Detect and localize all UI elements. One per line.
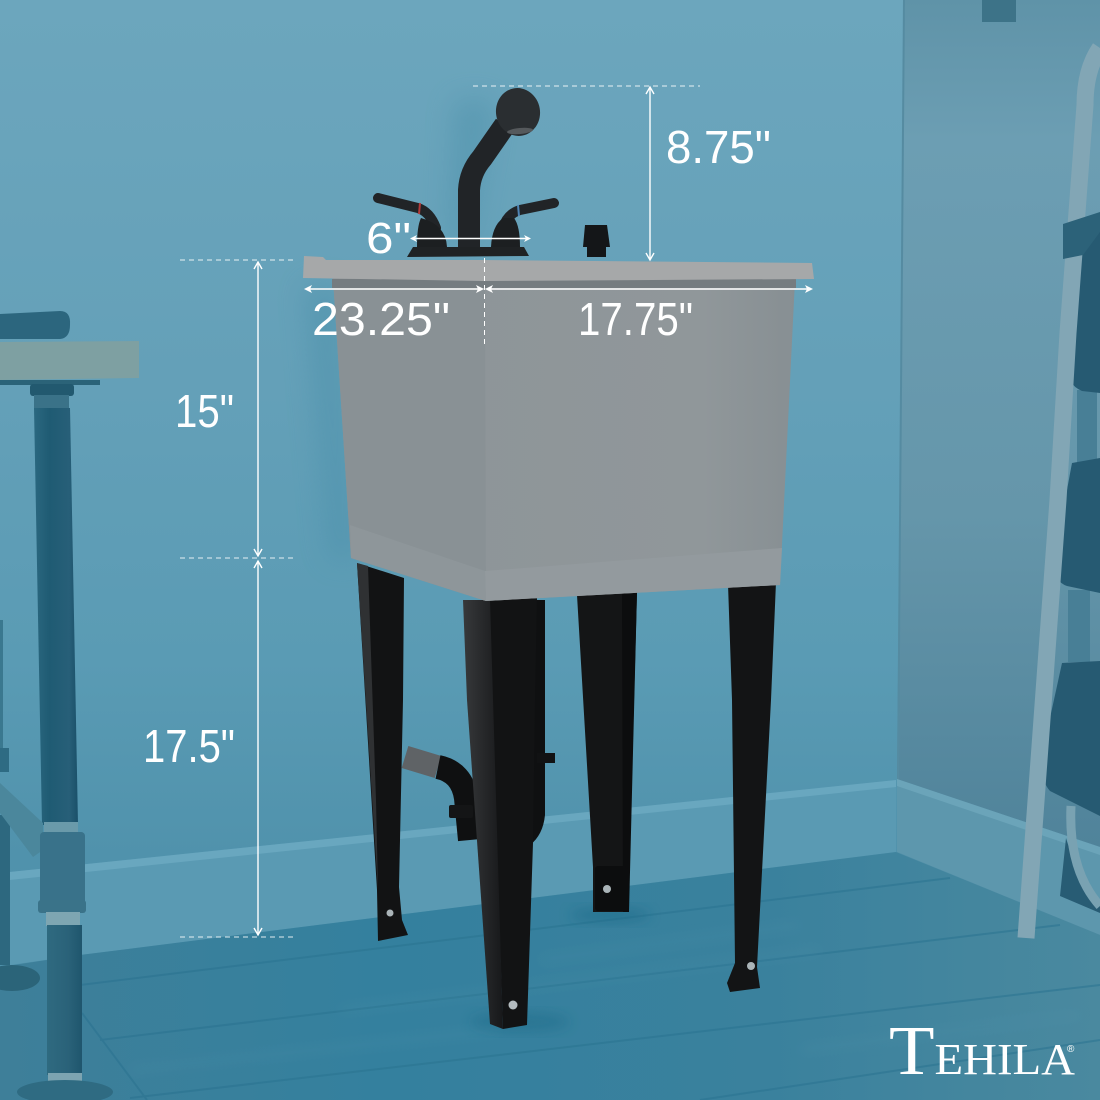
right handle	[503, 203, 554, 228]
dimension: faucet spread 6 in	[366, 214, 531, 263]
dimension: leg height 17.5 in	[143, 561, 295, 937]
registered mark: ®	[1067, 1044, 1075, 1055]
dimension: depth 23.25 in: 23.25"	[312, 293, 450, 345]
sink tub	[303, 256, 814, 601]
drain pipe	[405, 600, 555, 845]
dimension: faucet spread 6 in: 6"	[366, 214, 411, 263]
ladder rail	[1026, 48, 1100, 938]
sink leg center	[463, 598, 537, 1029]
ladder wall plate	[982, 0, 1016, 22]
wooden table top	[0, 341, 139, 380]
back legs and drain pipe	[405, 592, 637, 912]
dimension: width 17.75 in	[485, 285, 813, 345]
ladder bracket	[1063, 212, 1100, 259]
far left pipe	[0, 620, 40, 991]
floor	[0, 852, 1100, 1100]
soft shadows on wall	[305, 100, 495, 560]
dimension: leg height 17.5 in: 17.5"	[143, 720, 235, 772]
sink leg front right	[727, 582, 776, 992]
spout	[469, 125, 505, 247]
dimension: faucet height 8.75 in	[473, 86, 771, 260]
dimension: tub height 15 in	[175, 260, 295, 558]
ladder pads	[1040, 213, 1100, 816]
dimension: tub height 15 in: 15"	[175, 385, 234, 437]
step ladder	[982, 0, 1100, 938]
spray head	[492, 85, 544, 139]
left handle	[378, 198, 436, 228]
dimension: faucet height 8.75 in: 8.75"	[666, 121, 771, 173]
towel	[0, 311, 70, 339]
sink rim	[303, 256, 814, 281]
side table with pipe leg	[0, 311, 139, 1100]
dimension: depth 23.25 in	[304, 258, 484, 348]
sink leg front left	[357, 563, 408, 941]
faucet	[378, 85, 610, 257]
base plate	[407, 247, 529, 257]
drain stopper	[583, 225, 610, 257]
dimension: width 17.75 in: 17.75"	[578, 293, 693, 345]
logo: Tehila: TEHILA	[889, 1013, 1075, 1090]
baseboard	[0, 779, 1100, 965]
ladder rear tube and supports	[1068, 390, 1097, 662]
